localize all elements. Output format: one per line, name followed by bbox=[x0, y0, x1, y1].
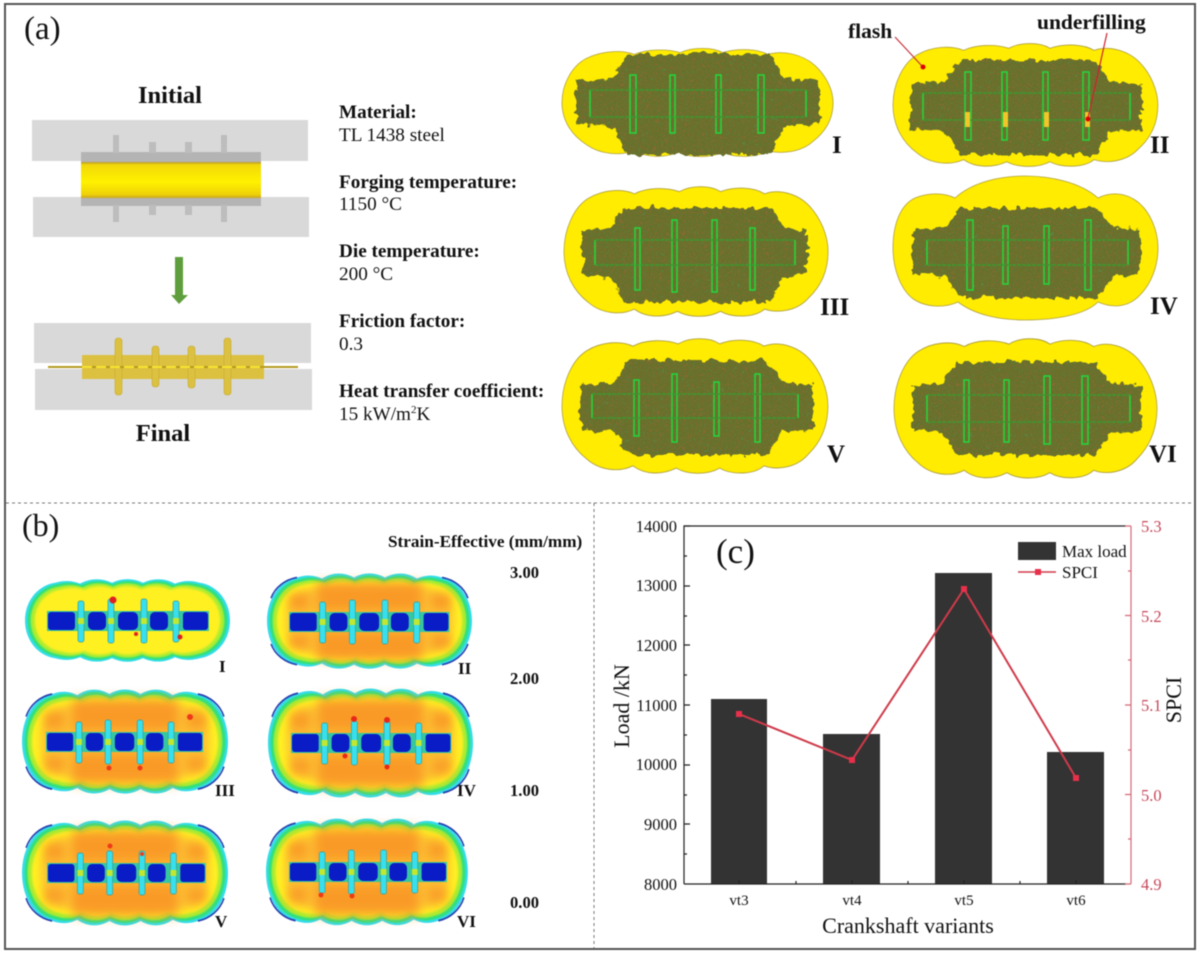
diagram: initial die setup bbox=[32, 82, 309, 237]
axis title: SPCI: SPCI bbox=[1161, 677, 1186, 723]
legend: strain scale: 3.00 bbox=[510, 563, 539, 582]
legend: chart: SPCI bbox=[1062, 563, 1098, 582]
category labels: vt3 bbox=[729, 893, 749, 909]
strain map: variant III bbox=[22, 689, 235, 800]
callout: flash bbox=[848, 19, 926, 70]
result: variant II bbox=[893, 44, 1169, 166]
result: variant II: II bbox=[1150, 132, 1169, 159]
left axis labels: 13000 bbox=[636, 576, 677, 595]
strain map: variant I: I bbox=[219, 657, 226, 676]
result: variant IV: IV bbox=[1150, 293, 1178, 320]
text block: process parameters: 2 bbox=[411, 404, 416, 416]
axes bbox=[684, 526, 1126, 884]
category labels: vt5 bbox=[954, 893, 974, 909]
left axis labels: 12000 bbox=[636, 636, 677, 655]
category labels: vt6 bbox=[1066, 893, 1086, 909]
legend: chart bbox=[1018, 542, 1127, 582]
strain map: variant II: II bbox=[458, 659, 472, 678]
text block: process parameters: 0.3 bbox=[339, 334, 363, 355]
result: variant VI: VI bbox=[1149, 441, 1177, 468]
strain map: variant VI bbox=[266, 819, 476, 931]
text block: process parameters: 200 °C bbox=[339, 264, 393, 285]
panel: (a) forging setup and flash results bbox=[24, 10, 1178, 478]
right axis labels bbox=[1141, 517, 1162, 894]
text block: process parameters: Die temperature: bbox=[339, 241, 480, 262]
right axis labels: 4.9 bbox=[1141, 875, 1162, 894]
left axis labels: 9000 bbox=[644, 815, 677, 834]
left axis labels: 11000 bbox=[636, 696, 677, 715]
legend: strain scale: Strain-Effective (mm/mm) bbox=[388, 532, 582, 551]
text block: process parameters: TL 1438 steel bbox=[339, 125, 445, 146]
text block: process parameters: Friction factor: bbox=[339, 311, 465, 332]
result: variant I bbox=[562, 48, 842, 159]
result: variant III: III bbox=[820, 294, 849, 321]
result: variant V bbox=[562, 339, 845, 473]
panel: (c) load and SPCI chart bbox=[609, 517, 1186, 938]
left axis labels: 8000 bbox=[644, 875, 677, 894]
left axis labels: 10000 bbox=[636, 755, 677, 774]
blank billet bbox=[81, 162, 261, 198]
strain map: variant II bbox=[267, 573, 472, 678]
category labels bbox=[729, 893, 1086, 909]
result: variant III bbox=[564, 187, 849, 321]
text block: process parameters: 15 kW/m bbox=[339, 404, 411, 425]
strain map: variant VI: VI bbox=[457, 912, 476, 931]
heading: panel b label: (b) bbox=[22, 507, 59, 543]
legend: strain scale: 2.00 bbox=[510, 669, 539, 688]
heading: panel a label: (a) bbox=[24, 11, 61, 47]
strain map: variant IV bbox=[268, 689, 477, 800]
axis title: Crankshaft variants: Crankshaft variants bbox=[822, 913, 994, 938]
arrow: initial to final bbox=[171, 257, 188, 304]
right axis labels: 5.0 bbox=[1141, 786, 1162, 805]
legend: chart: Max load bbox=[1062, 542, 1127, 561]
category labels: vt4 bbox=[842, 893, 862, 909]
line: SPCI bbox=[736, 586, 1079, 781]
label: Initial: Initial bbox=[138, 82, 202, 109]
left axis labels: 14000 bbox=[636, 517, 677, 536]
text block: process parameters: Forging temperature: bbox=[339, 172, 517, 193]
diagram: final die setup bbox=[34, 323, 312, 447]
result: variant IV bbox=[893, 176, 1178, 320]
text block: process parameters: K bbox=[416, 404, 430, 425]
strain map: variant V bbox=[22, 820, 228, 931]
bars: max load bbox=[711, 573, 1104, 884]
callout: underfilling bbox=[1037, 10, 1146, 122]
left axis labels bbox=[636, 517, 677, 894]
legend: strain scale: 0.00 bbox=[510, 893, 539, 912]
strain map: variant V: V bbox=[215, 912, 228, 931]
strain map: variant IV: IV bbox=[457, 781, 477, 800]
strain map: variant III: III bbox=[215, 781, 235, 800]
heading: panel c label: (c) bbox=[716, 532, 755, 571]
callout: underfilling: underfilling bbox=[1037, 10, 1146, 34]
axis title: Load /kN: Load /kN bbox=[609, 664, 634, 748]
result: variant VI bbox=[894, 339, 1177, 478]
result: variant I: I bbox=[832, 132, 842, 159]
panel: (b) effective strain maps bbox=[22, 507, 582, 931]
text block: process parameters: Material: bbox=[339, 102, 417, 123]
callout: flash: flash bbox=[848, 19, 892, 43]
legend: strain scale: 1.00 bbox=[510, 781, 539, 800]
legend: strain scale bbox=[388, 532, 582, 912]
strain map: variant I bbox=[25, 579, 230, 676]
label: Final: Final bbox=[136, 420, 190, 447]
right axis labels: 5.3 bbox=[1141, 517, 1162, 536]
right axis labels: 5.1 bbox=[1141, 696, 1162, 715]
result: variant V: V bbox=[827, 441, 845, 468]
text block: process parameters bbox=[339, 102, 544, 425]
right axis labels: 5.2 bbox=[1141, 607, 1162, 626]
text block: process parameters: 1150 °C bbox=[339, 194, 402, 215]
text block: process parameters: Heat transfer coefficient: bbox=[339, 381, 544, 402]
